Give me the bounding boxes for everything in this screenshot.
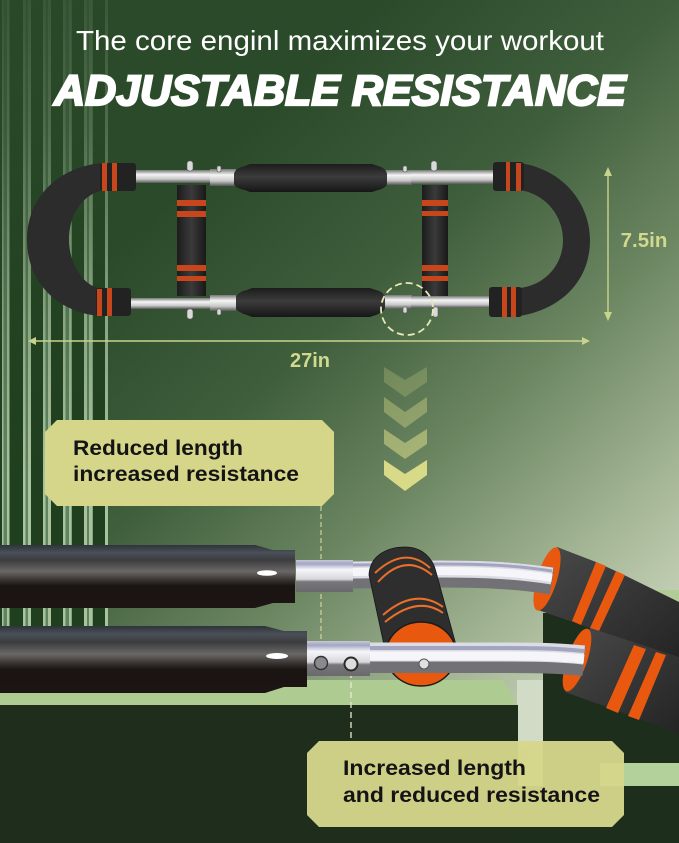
title line: The core enginl maximizes your workout — [76, 25, 604, 56]
height label: 7.5in — [621, 229, 667, 252]
lower scene: platforms — [0, 590, 679, 843]
top right surface — [590, 590, 679, 612]
callout: increased length: Increased length — [343, 757, 526, 780]
pale wall gap — [517, 680, 543, 750]
bottom foam grip — [236, 288, 385, 317]
spring pin in rod — [419, 659, 429, 669]
close-up cross handle — [369, 547, 456, 686]
adjustment pins — [187, 161, 438, 319]
dashed highlight circle — [381, 283, 433, 335]
callout: increased length — [307, 741, 624, 827]
right vertical handle — [422, 185, 448, 296]
width label: 27in — [290, 350, 330, 372]
upper right foam grip — [528, 545, 679, 660]
height dimension arrow — [604, 167, 612, 321]
lower black tube — [0, 626, 307, 693]
lower right foam grip — [557, 626, 679, 733]
lower chrome rod — [306, 641, 584, 676]
left top collar — [100, 163, 136, 191]
callout: reduced length — [45, 420, 334, 506]
upper black tube — [0, 545, 295, 608]
dashed guide for increased length — [350, 672, 352, 741]
left bottom collar — [96, 288, 131, 316]
dashed guide for reduced length — [320, 506, 322, 656]
upper chrome rod — [296, 560, 552, 592]
callout: reduced length: increased resistance — [73, 463, 299, 486]
right dark block — [543, 613, 679, 843]
lower fill — [517, 786, 679, 843]
right green ledge — [600, 763, 679, 786]
chrome rods — [128, 169, 495, 311]
right top collar — [493, 162, 524, 191]
main heading: ADJUSTABLE RESISTANCE — [53, 67, 627, 115]
spring pin in sleeve — [344, 658, 358, 670]
front dark block — [0, 705, 518, 843]
decorative stripes panel — [0, 0, 108, 640]
right curved foam — [520, 163, 590, 316]
top foam grip — [234, 164, 387, 192]
left curved foam — [27, 163, 106, 316]
front surface — [0, 680, 517, 705]
orange end cap — [386, 622, 456, 686]
product: top view of the exerciser — [27, 161, 590, 319]
hole with ring — [314, 656, 328, 670]
right bottom collar — [489, 287, 522, 317]
callout: reduced length: Reduced length — [73, 437, 243, 460]
callout: increased length: and reduced resistance — [343, 784, 600, 807]
left vertical handle — [177, 185, 206, 296]
downward chevrons — [384, 367, 427, 491]
width dimension arrow — [28, 337, 590, 345]
